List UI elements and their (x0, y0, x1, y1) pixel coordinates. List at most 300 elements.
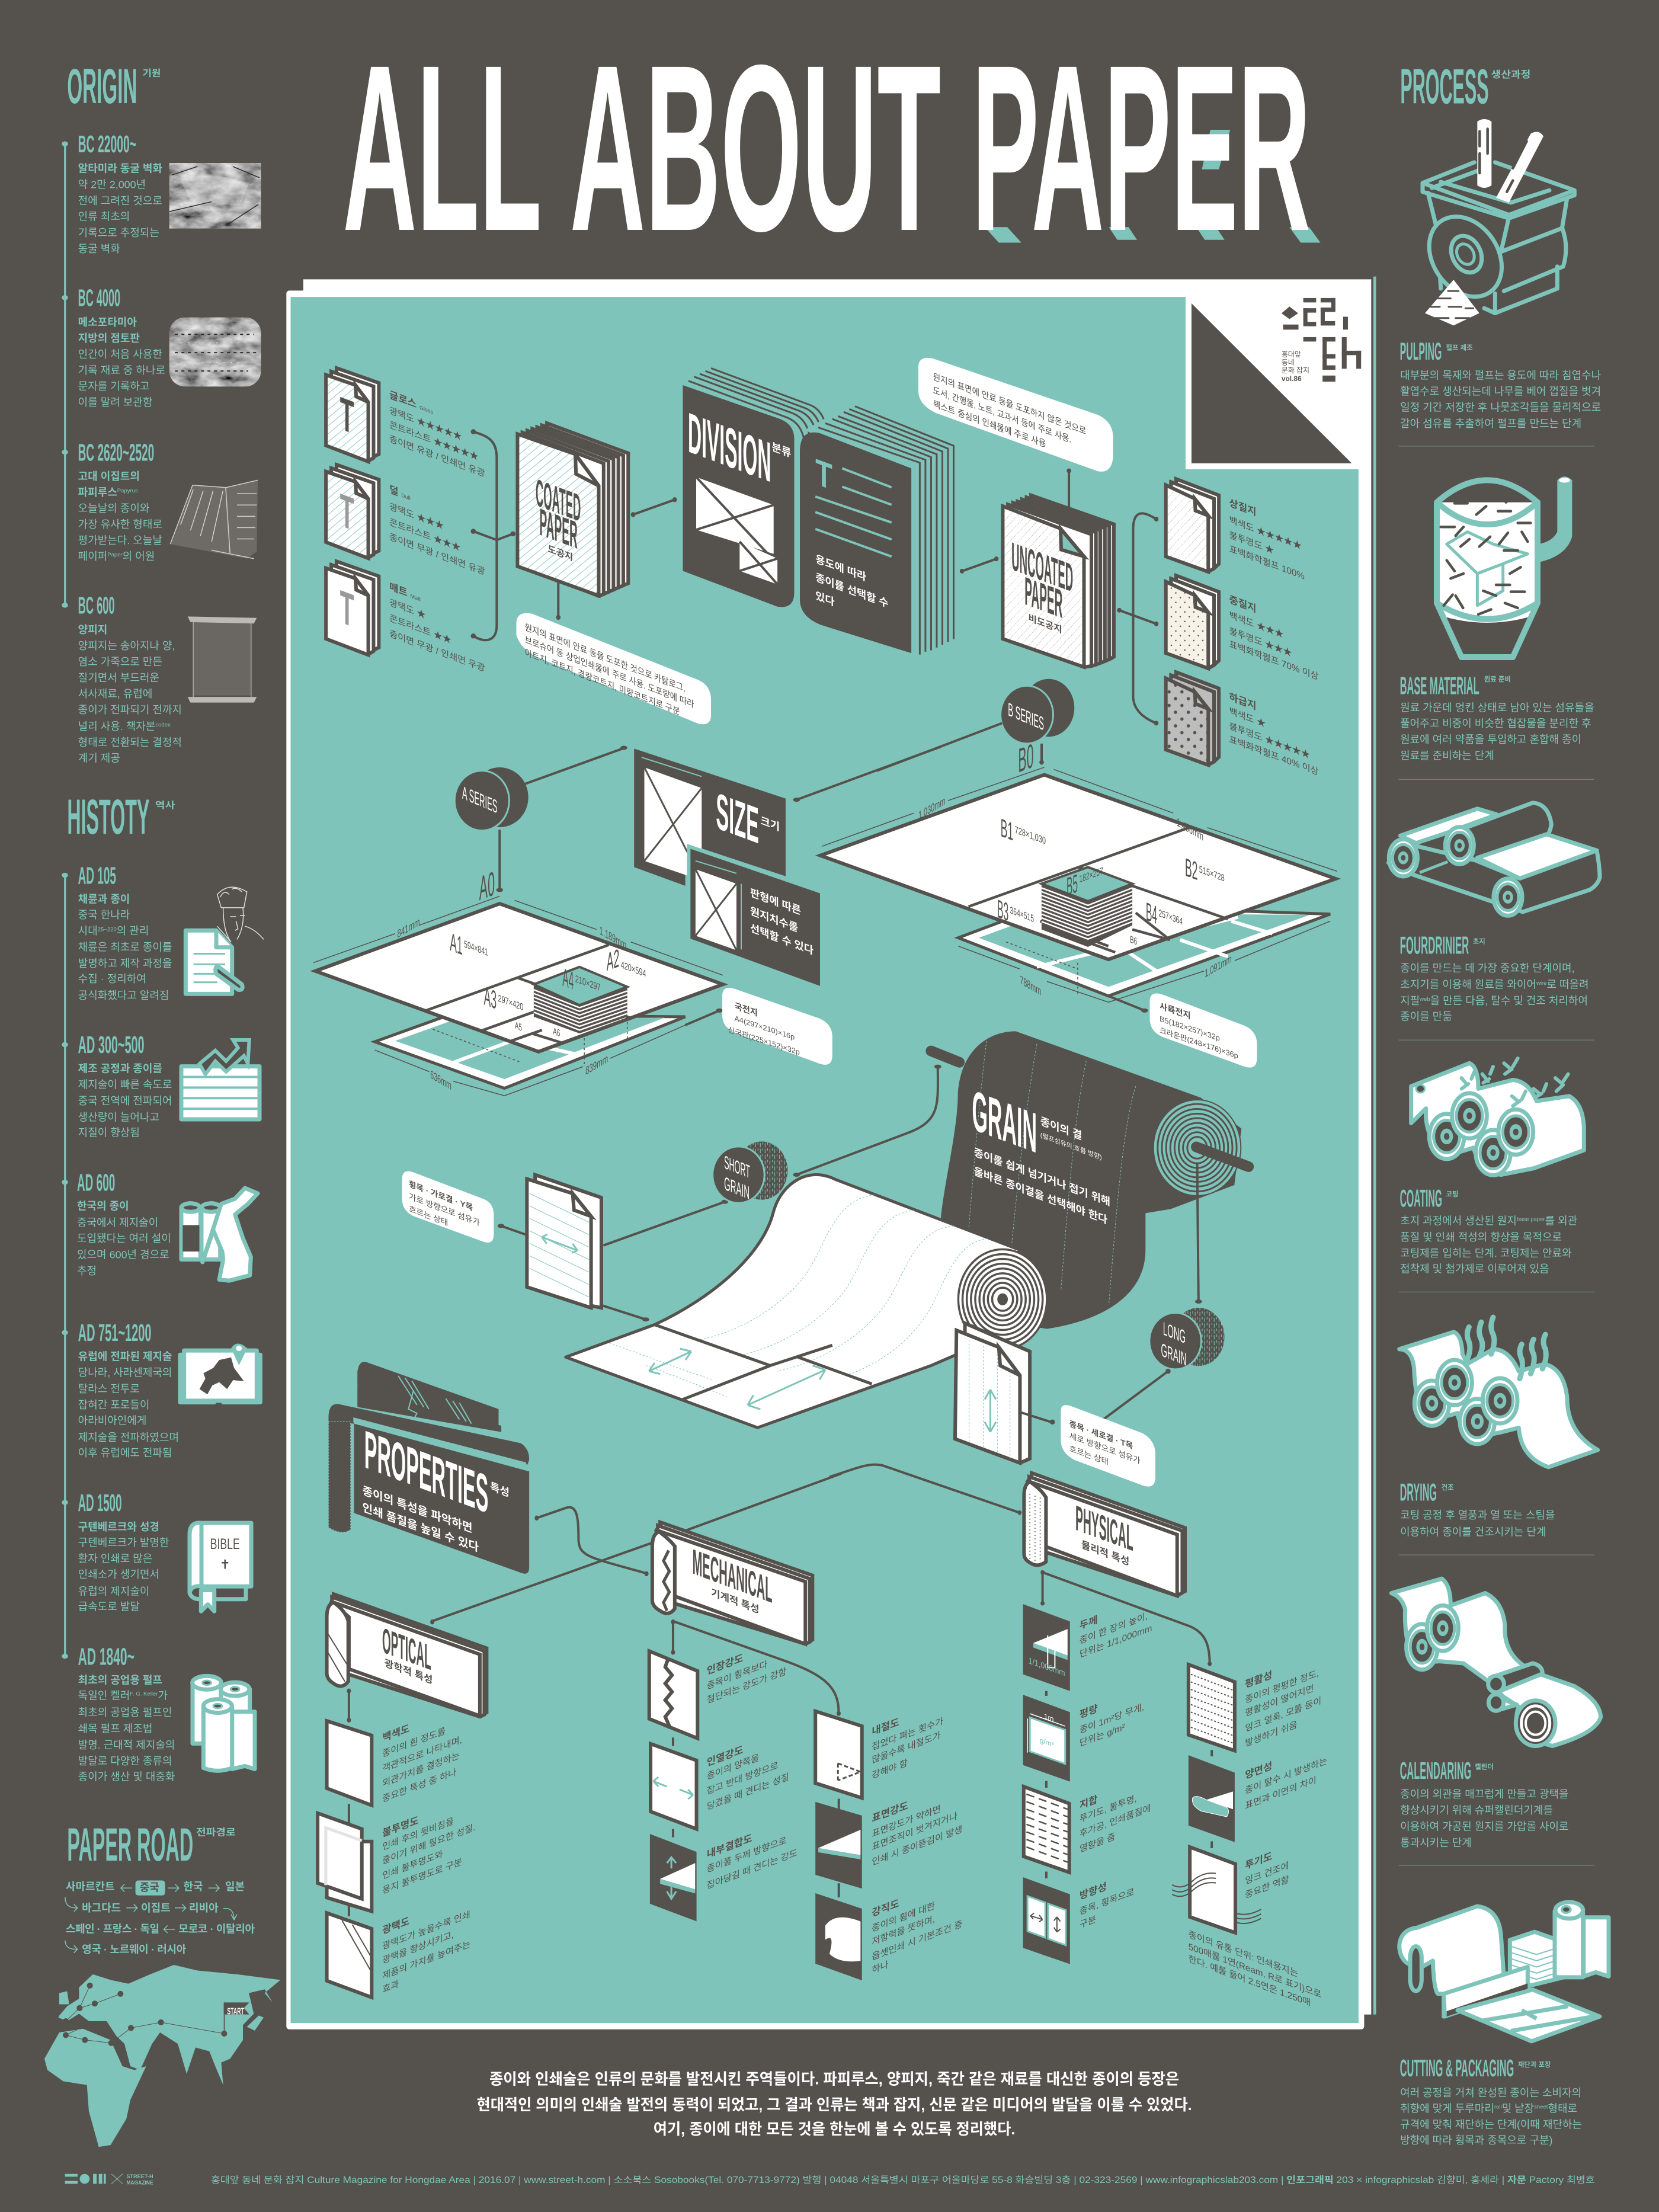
coating text: base paper (1517, 1217, 1545, 1223)
origin BC 4000: 문자를 기록하고 (78, 380, 149, 392)
origin BC 22000: 알타미라 동굴 벽화 (78, 162, 162, 174)
history AD 600: 중국에서 제지술이 (77, 1217, 158, 1228)
A size labels: A3 (484, 982, 497, 1015)
text: folding: 강해야 함 (872, 1758, 908, 1781)
text: matt: 광택도 ★ (389, 597, 426, 621)
calendaring text: 캘린더 (1475, 1763, 1494, 1771)
text: direction: 종목, 횡목으로 (1080, 1887, 1134, 1917)
tab: optical (327, 1594, 486, 1717)
origin BC 22000: 인류 최초의 (78, 210, 130, 222)
base material text: 풀어주고 비중이 비슷한 협잡물을 분리한 후 (1400, 718, 1591, 729)
magazine issue text (1282, 350, 1309, 383)
A size labels: 297×420 (498, 992, 523, 1013)
text: medium: 백색도 ★★★ (1229, 610, 1284, 641)
text: woodfree (1229, 497, 1305, 582)
base material text: 원료를 준비하는 단계 (1400, 750, 1494, 762)
callout: coated definition (516, 613, 711, 724)
A size labels: 420×594 (621, 959, 646, 979)
dimension lines (313, 767, 1337, 1096)
photo: clay tablet (169, 318, 261, 386)
B size labels: B6 (1130, 933, 1137, 947)
B size labels: 728×1,030 (1015, 824, 1046, 847)
fourdrinier text: 초지 (1473, 938, 1485, 946)
front sheet (286, 290, 1364, 2029)
origin BC 4000: 메소포타미아 (78, 316, 137, 328)
size note: 선택할 수 있다 (750, 922, 814, 957)
history AD 600: 한국의 종이 (77, 1200, 129, 1212)
right column: process heading: 생산과정 (1491, 69, 1530, 80)
card: smoothness (1189, 1664, 1235, 1750)
icon: rising chart on paper (181, 1040, 260, 1119)
callout text: long grain: 세로 방향으로 섬유가 (1069, 1431, 1141, 1465)
text: matt: 종이면 무광 / 인쇄면 무광 (389, 628, 485, 674)
text: formation: 투기도, 불투명, (1080, 1793, 1137, 1824)
history AD 1500: 유럽의 제지술이 (78, 1585, 149, 1597)
text: gloss property: 효과 (382, 1979, 399, 1995)
infographic canvas: T (340, 580, 354, 638)
pulping text: PULPING (1400, 337, 1442, 365)
SIZE heading: SIZE (716, 782, 759, 854)
A size labels: A4 (562, 963, 574, 995)
mechanical property cards column 1 (649, 1619, 841, 1921)
text: gloss property: 광택도가 높을수록 인쇄 (382, 1909, 470, 1952)
text: direction (1080, 1870, 1134, 1931)
card: whiteness (327, 1721, 371, 1806)
callout: uncoated definition (918, 358, 1113, 472)
callout: kukjeonji (722, 988, 832, 1065)
coating text: 코팅 (1446, 1190, 1458, 1198)
coating text: 를 외관 (1545, 1215, 1577, 1227)
book: uncoated paper (1003, 495, 1114, 667)
B size labels: B1 (1001, 814, 1013, 846)
left column: origin heading: ORIGIN (67, 59, 137, 114)
size note: 판형에 따른 (750, 886, 801, 917)
text: formation: 후가공, 인쇄품질에 (1080, 1803, 1151, 1839)
properties section drawings (328, 1362, 841, 1624)
A sizes base frame (374, 1013, 686, 1089)
infographic canvas: T (340, 387, 354, 444)
white roll end (958, 1249, 1047, 1349)
text: basis weight: 단위는 g/m² (1080, 1721, 1125, 1749)
callout text: kukjeonji: 국전지 (735, 1001, 758, 1019)
history AD 600: 추정 (77, 1265, 97, 1277)
calendaring text: 향상시키기 위해 슈퍼캘린더기계를 (1400, 1804, 1553, 1816)
callout text: short grain: 가로 방향으로 섬유가 (409, 1192, 480, 1228)
text: internal bond (707, 1815, 798, 1891)
text: porosity: 잉크 건조에 (1245, 1860, 1289, 1887)
text: tear (707, 1727, 789, 1812)
text: opacity: 인쇄 불투명도와 (382, 1849, 443, 1881)
origin BC 2620 (78, 438, 162, 562)
text: tear: 종이의 양쪽을 (707, 1752, 759, 1782)
text: basis weight (1080, 1685, 1144, 1749)
origin BC 600: 종이가 전파되기 전까지 (78, 704, 182, 716)
properties connector (430, 1474, 841, 1624)
A size labels: A2 (607, 944, 619, 977)
text: folding (872, 1699, 943, 1781)
size section drawings (313, 745, 1337, 1096)
history AD 1840: 종이가 생산 및 대중화 (78, 1771, 175, 1782)
physical property cards (1023, 1604, 1261, 1964)
text: stiffness: 종이의 휨에 대한 (872, 1900, 935, 1934)
cutting text: 재단과 포장 (1518, 2060, 1551, 2069)
paper road route text: 리비아 (189, 1902, 219, 1914)
history AD 1840: AD 1840~ (78, 1643, 134, 1670)
note: ream unit: 한다. 예를 들어 2.5연은 1,250매 (1189, 1954, 1311, 2008)
callout text: kukjeonji: 신국판(225×152)×32p (728, 1025, 800, 1057)
left column: paper road heading (67, 1819, 236, 1871)
drying text (1399, 1478, 1594, 1555)
text: tensile (707, 1636, 787, 1706)
origin BC 600: codex (155, 722, 171, 728)
text: tear: 잡고 반대 방향으로 (707, 1760, 778, 1797)
text: whiteness: 종이의 흰 정도를 (382, 1726, 446, 1759)
B size labels: B4 (1146, 898, 1157, 930)
card: tear (651, 1744, 697, 1829)
paper road route text: 이집트 (141, 1902, 171, 1914)
B size labels: 182×257 (1079, 865, 1103, 885)
cutting text: 형태로 (1548, 2102, 1577, 2114)
intro paragraph: 여기, 종이에 대한 모든 것을 한눈에 볼 수 있도록 정리했다. (654, 2120, 1015, 2138)
cutting text: 여러 공정을 거쳐 완성된 종이는 소비자의 (1400, 2087, 1581, 2099)
title: ALL ABOUT PAPER: ALL (343, 15, 542, 280)
calendaring text (1399, 1757, 1594, 1866)
panel: SIZE note (688, 846, 822, 988)
paper road route text (66, 1881, 255, 1955)
infographic canvas: A SERIES (462, 782, 498, 817)
history AD 751: 당나라, 사라센제국의 (78, 1366, 172, 1378)
text: two-sidedness: 양면성 (1245, 1760, 1272, 1781)
origin BC 600: 널리 사용. 책자본 (78, 721, 155, 732)
icon: coating rolls (1411, 1058, 1584, 1175)
infographic canvas: PAPER (1024, 568, 1062, 627)
grade connector (1119, 513, 1156, 723)
text: thickness: 두께 (1080, 1614, 1098, 1632)
text: porosity: 투기도 (1245, 1850, 1272, 1871)
properties main banner (328, 1404, 529, 1574)
text: two-sidedness: 표면과 이면의 차이 (1245, 1775, 1317, 1811)
text: tear: 당겼을 때 견디는 성질 (707, 1772, 789, 1812)
history AD 751: 제지술을 전파하였으며 (78, 1432, 179, 1443)
calendaring text: 종이의 외관을 매끄럽게 만들고 광택을 (1400, 1788, 1569, 1800)
stack: dull (326, 465, 379, 558)
callout text: short grain: 횡목 · 가로결 · Y목 (409, 1179, 473, 1212)
text: formation: 지합 (1080, 1793, 1098, 1811)
text: porosity (1245, 1844, 1289, 1900)
properties note: 인쇄 품질을 높일 수 있다 (363, 1501, 479, 1554)
infographic canvas: MECHANICAL (693, 1542, 773, 1611)
text: whiteness: 외관가치를 결정하는 (382, 1750, 460, 1789)
history AD 1840: 최초의 공업용 펄프 (78, 1674, 162, 1686)
B size labels: 1,030mm (918, 794, 945, 822)
history AD 1840: 발명. 근대적 제지술의 (78, 1739, 175, 1751)
text: matt (389, 581, 485, 674)
infographic canvas: UNCOATED (1011, 534, 1073, 601)
A series disc (454, 767, 529, 831)
thickness label: 1/1,000mm (1029, 1656, 1065, 1678)
frame icon (642, 757, 702, 881)
infographic canvas: GRAIN (724, 1173, 750, 1203)
right column: process heading (1400, 59, 1530, 114)
infographic canvas: B0 (1018, 737, 1034, 780)
history AD 1500: 활자 인쇄로 많은 (78, 1553, 152, 1565)
drying text: DRYING (1400, 1478, 1437, 1506)
history AD 300: 제지술이 빠른 속도로 (78, 1079, 172, 1091)
card: grain direction (1023, 1877, 1070, 1964)
infographic canvas: PHYSICAL (1075, 1498, 1133, 1559)
drying text: 이용하여 종이를 건조시키는 단계 (1400, 1526, 1546, 1538)
origin BC 22000: 전에 그려진 것으로 (78, 195, 162, 207)
text: surface strength (872, 1779, 962, 1868)
magazine issue text: 홍대앞 (1282, 350, 1301, 358)
intro paragraph: 현대적인 의미의 인쇄술 발전의 동력이 되었고, 그 결과 인류는 책과 잡지, 신문 같은 미디어의 발달을 이룰 수 있었다. (477, 2096, 1192, 2114)
long grain page (955, 1323, 1171, 1463)
cutting text: 규격에 맞춰 재단하는 단계(이때 재단하는 (1400, 2119, 1582, 2131)
magazine issue text: 동네 (1282, 358, 1295, 367)
text: tensile: 종목이 횡목보다 (707, 1659, 768, 1692)
history AD 1840: 가 (158, 1690, 168, 1702)
connector to uncoated (960, 468, 1071, 574)
grain heading: 종이의 결 (1040, 1115, 1082, 1142)
text: internal bond: 내부결합도 (707, 1832, 752, 1860)
origin BC 600: 질기면서 부드러운 (78, 672, 159, 684)
pulping text: 활엽수로 생산되는데 나무를 베어 껍질을 벗겨 (1400, 385, 1601, 397)
magazine logo (1282, 298, 1361, 382)
B series disc (877, 679, 1074, 771)
infographic canvas: PROPERTIES (364, 1419, 488, 1525)
fourdrinier text: 초지기를 이용해 원료를 와이어 (1400, 979, 1536, 991)
text: internal bond: 종이를 두께 방향으로 (707, 1835, 787, 1875)
text: low grade: 불투명도 ★★★★★ (1229, 721, 1310, 761)
text: gloss (389, 389, 485, 479)
origin BC 600: 양피지는 송아지나 양, (78, 640, 175, 652)
T and line icon (815, 450, 892, 556)
text: dull (389, 483, 485, 577)
text: opacity: 용지 불투명도로 구분 (382, 1856, 462, 1896)
base material text: 원료 가운데 엉킨 상태로 남아 있는 섬유들을 (1400, 702, 1594, 713)
division panels: DIVISION (688, 401, 771, 494)
card: tensile (649, 1651, 697, 1739)
text: whiteness: 객관적으로 나타내며, (382, 1734, 462, 1774)
grain note: 올바른 종이결을 선택해야 한다 (974, 1165, 1107, 1226)
long grain label (1161, 1318, 1186, 1370)
text: stiffness: 하나 (872, 1959, 888, 1976)
icon: fourdrinier (1388, 803, 1600, 915)
paper road route text: 한국 (184, 1881, 203, 1893)
intro paragraph: 종이와 인쇄술은 인류의 문화를 발전시킨 주역들이다. 파피루스, 양피지, 죽간 같은 재료를 대신한 종이의 등장은 (489, 2070, 1179, 2088)
fourdrinier text: web (1419, 996, 1430, 1003)
origin BC 600: 형태로 전환되는 결정적 (78, 737, 182, 748)
infographic canvas: B SERIES (1008, 699, 1044, 734)
coating text: COATING (1400, 1184, 1442, 1212)
callout text: coated: 브로슈어 등 상업인쇄물에 주로 사용. 도포량에 따라 (525, 635, 694, 710)
fourdrinier text: FOURDRINIER (1400, 931, 1469, 959)
origin BC 2620: 파피루스 (78, 486, 117, 498)
drying text: 코팅 공정 후 열풍과 열 또는 스팀을 (1400, 1509, 1555, 1521)
text: dull: 덜 Dull (389, 483, 411, 502)
left column: history heading: HISTOTY (67, 789, 149, 844)
callout text: kukjeonji: A4(297×210)×16p (735, 1014, 795, 1042)
text: gloss: 콘트라스트 ★★★★★ (389, 420, 479, 463)
B size labels: B3 (997, 895, 1008, 927)
history AD 105: 의 관리 (117, 925, 149, 937)
callout text: short grain: 흐르는 상태 (409, 1203, 448, 1228)
text: porosity: 중요한 역할 (1245, 1874, 1289, 1900)
B5 stack (1042, 867, 1132, 947)
text: matt: 콘트라스트 ★★ (389, 613, 451, 646)
text: gloss: 종이면 유광 / 인쇄면 유광 (389, 434, 485, 479)
A size labels: A5 (515, 1019, 522, 1033)
text: medium: 중질지 (1229, 593, 1257, 614)
callout: sarukjeonji (1149, 993, 1257, 1068)
stack: gloss (326, 368, 379, 462)
pulping text: 일정 기간 저장한 후 나뭇조각들을 물리적으로 (1400, 402, 1601, 414)
text: smoothness: 발생하기 쉬움 (1245, 1719, 1298, 1749)
division note: 종이를 선택할 수 (815, 571, 888, 610)
history AD 751: 탈라스 전투로 (78, 1383, 140, 1395)
A size labels (397, 915, 646, 1093)
history AD 600 (77, 1169, 171, 1277)
book label: uncoated paper (1011, 534, 1073, 635)
text: gloss: 글로스 Gloss (389, 389, 433, 417)
paper road route text: 영국 · 노르웨이 · 러시아 (82, 1944, 187, 1955)
stack: matt (326, 561, 379, 655)
text: smoothness (1245, 1650, 1321, 1749)
footer logo: MAGAZINE (126, 2180, 153, 2186)
callout text: sarukjeonji: 크라운판(248×176)×36p (1160, 1026, 1238, 1060)
footer logo: STREET-H (126, 2173, 153, 2179)
drying text: 건조 (1442, 1483, 1454, 1491)
text: tensile: 절단되는 강도가 강함 (707, 1666, 787, 1706)
coating text (1399, 1184, 1594, 1292)
infographic canvas: SHORT (724, 1151, 750, 1183)
origin BC 22000: 동굴 벽화 (78, 243, 120, 255)
pulping text (1399, 337, 1601, 447)
text: opacity: 불투명도 (382, 1814, 419, 1839)
icon: base material tank (1437, 476, 1572, 657)
book label: uncoated paper: 비도공지 (1029, 613, 1062, 635)
text: woodfree: 백색도 ★★★★★ (1229, 515, 1302, 552)
fourdrinier text: 종이를 만드는 데 가장 중요한 단계이며, (1400, 962, 1575, 974)
pulping text: 펄프 제조 (1446, 343, 1473, 351)
text: opacity: 인쇄 후의 뒷비침을 (382, 1816, 454, 1852)
callout: A connector (686, 996, 1148, 1025)
cutting text: roll (1494, 2104, 1502, 2110)
text: direction: 구분 (1080, 1915, 1096, 1931)
text: stiffness (872, 1874, 962, 1976)
history AD 1500: 급속도로 발달 (78, 1601, 140, 1613)
B size labels: 257×364 (1158, 907, 1183, 927)
optical property cards (318, 1688, 371, 1997)
grain arrows on sheet (649, 1349, 825, 1409)
panel A pages (683, 367, 835, 440)
division note (815, 553, 888, 628)
callout text: coated: 아트지, 코트지, 경량코트지, 미량코트지로 구분 (525, 647, 680, 718)
origin BC 22000: 기록으로 추정되는 (78, 227, 159, 239)
coating text: 품질 및 인쇄 적성의 향상을 목적으로 (1400, 1231, 1562, 1243)
fourdrinier text (1399, 931, 1594, 1041)
history AD 751: 아라비아인에게 (78, 1414, 146, 1426)
callout text: long grain: 종목 · 세로결 · T목 (1069, 1419, 1133, 1451)
text: medium (1229, 593, 1319, 682)
text: whiteness: 중요한 특성 중 하나 (382, 1767, 456, 1804)
size note: 원지치수를 (750, 905, 798, 934)
origin BC 4000: 기록 재료 중 하나로 (78, 364, 165, 376)
text: dull: 광택도 ★★★ (389, 501, 444, 532)
callout text: coated: 원지의 표면에 안료 등을 도포한 것으로 카탈로그, (525, 622, 686, 694)
book label: coated paper (536, 471, 581, 564)
fourdrinier text: wire (1536, 980, 1546, 987)
history AD 300: AD 300~500 (78, 1031, 145, 1058)
paper road route text: 사마르칸트 (66, 1881, 115, 1893)
origin BC 2620: 의 어원 (123, 550, 155, 562)
coating text: 접착제 및 첨가제로 이루어져 있음 (1400, 1263, 1549, 1275)
B size labels: B5 (1066, 869, 1078, 901)
base material text: BASE MATERIAL (1400, 671, 1479, 699)
text: whiteness: 백색도 (382, 1722, 409, 1744)
text: formation (1080, 1774, 1151, 1855)
text: tensile: 인장강도 (707, 1652, 743, 1677)
properties heading (364, 1419, 510, 1525)
A size labels: A6 (553, 1025, 560, 1039)
origin BC 4000: BC 4000 (78, 284, 120, 312)
A size labels: 210×297 (575, 972, 601, 994)
card: stiffness (815, 1893, 862, 1980)
callout text: sarukjeonji: B5(182×257)×32p (1160, 1014, 1220, 1043)
text: medium: 불투명도 ★★★ (1229, 625, 1292, 659)
text: surface strength: 인쇄 시 종이뜯김이 발생 (872, 1824, 962, 1868)
origin BC 2620: 고대 이집트의 (78, 470, 140, 482)
text: folding: 많을수록 내절도가 (872, 1730, 941, 1766)
pulping text: 대부분의 목재와 펄프는 용도에 따라 침엽수나 (1400, 370, 1601, 382)
history AD 600: 있으며 600년 경으로 (77, 1249, 169, 1261)
history AD 1500: 구텐베르크가 발명한 (78, 1536, 169, 1548)
history AD 300 (78, 1031, 172, 1139)
infographic canvas: LONG (1163, 1318, 1186, 1347)
text: gloss property: 광택을 향상시키고, (382, 1929, 454, 1966)
intro paragraph (477, 2070, 1192, 2138)
history AD 1840: 독일인 켈러 (78, 1690, 130, 1702)
text: stiffness: 옵셋인쇄 시 기본조건 중 (872, 1919, 962, 1963)
calendaring text: 이용하여 가공된 원지를 가압롤 사이로 (1400, 1820, 1569, 1832)
card: gloss (327, 1913, 371, 1997)
stack: low grade (1166, 672, 1219, 765)
card: opacity (318, 1813, 371, 1912)
panel: coated paper stacks (326, 368, 513, 655)
right column: process heading: PROCESS (1400, 59, 1489, 114)
infographic canvas: T (340, 484, 354, 541)
history AD 105: 발명하고 제작 과정을 (78, 958, 172, 969)
history AD 105: 수집 · 정리하여 (78, 973, 146, 985)
card: formation (1024, 1787, 1069, 1872)
A4 stack (534, 967, 627, 1033)
text: surface strength: 표면강도가 약하면 (872, 1804, 941, 1839)
teal panel with folded corner (290, 297, 1359, 2023)
text: dull: 종이면 무광 / 인쇄면 유광 (389, 532, 485, 577)
icon: paper rolls (193, 1676, 255, 1771)
B size labels: 788mm (1020, 974, 1041, 998)
text: opacity: 줄이기 위해 필요한 성질. (382, 1822, 475, 1867)
infographic canvas: PAPER (539, 501, 578, 558)
history AD 751: 잡혀간 포로들이 (78, 1399, 149, 1411)
text: folding: 접었다 펴는 횟수가 (872, 1716, 943, 1753)
tab label: optical: 광학적 특성 (385, 1657, 433, 1686)
grain heading (972, 1078, 1102, 1165)
origin BC 4000: 이를 말려 보관함 (78, 396, 152, 408)
properties heading: 특성 (490, 1480, 510, 1499)
basis weight labels: 1m (1044, 1712, 1053, 1723)
history AD 1840: 최초의 공업용 펄프인 (78, 1707, 172, 1718)
